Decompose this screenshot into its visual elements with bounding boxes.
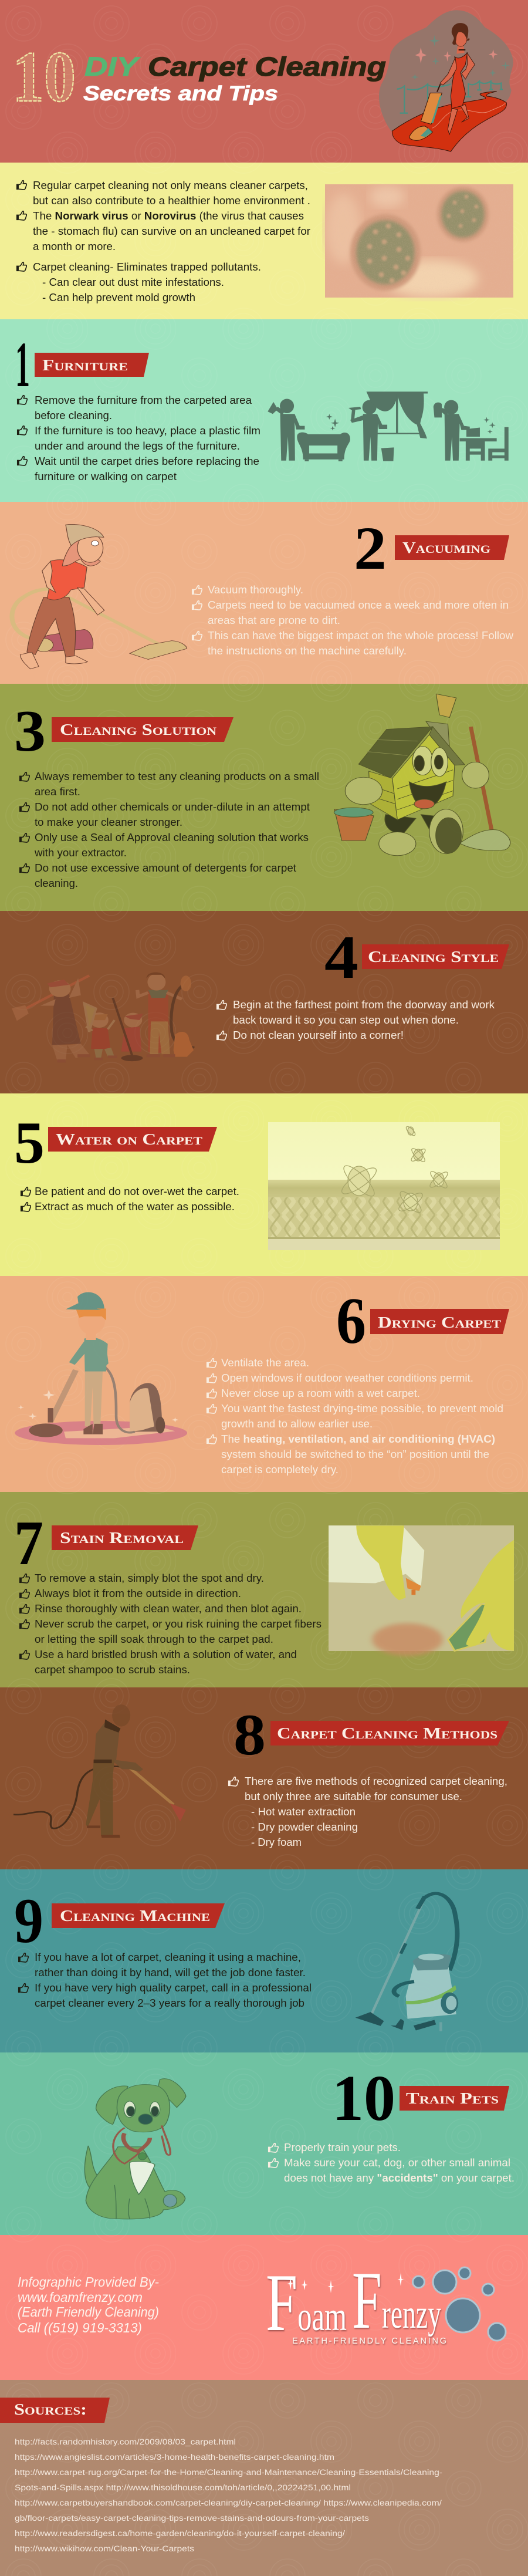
heading banner: train pets [400,2086,509,2111]
bullet: accidents: does not have any "accidents" on your carpet. [284,2172,515,2184]
bullet: accidents: Make sure your cat, dog, or other small animal [284,2157,510,2169]
panel: 8 carpet cleaning methods [13,1702,509,1848]
bullet: HVAC: carpet is completely dry. [221,1464,339,1476]
illustration: woman vacuuming [12,524,187,669]
heading banner: cleaning solution [52,717,233,742]
heading banner: cleaning style [362,944,509,969]
bullet: corner: Do not clean yourself into a corner! [233,1029,404,1041]
bullet: rinse: Rinse thoroughly with clean water, and then blot again. [35,1603,302,1615]
heading banner: carpet cleaning methods: Carpet Cleaning Methods [277,1724,497,1742]
source links: gb/floor-carpets/easy-carpet-cleaning-tips-remove-stains-and-odours-from-your-carpets [15,2514,369,2523]
bullet: seal of approval [19,832,309,859]
bullet: HVAC: The heating, ventilation, and air conditioning (HVAC) [221,1433,495,1445]
numeral 2: 2 [354,515,387,582]
bullet: biggest impact [192,630,514,657]
panel: 6 drying carpet [15,1285,509,1476]
logo: Foam Frenzy [266,2255,506,2348]
bullet: once a week: Carpets need to be vacuumed once a week and more often in [208,599,509,611]
bullet: wait until dry: Wait until the carpet dries before replacing the [35,455,259,467]
illustration: man with carpet cleaner [15,1292,187,1445]
illustration: cleaners silhouettes [268,391,509,461]
bullet: pollutants [16,261,261,303]
bullet: never scrub: Never scrub the carpet, or you risk ruining the carpet fibers [35,1618,321,1630]
bullet: test products: Always remember to test any cleaning products on a small [35,771,319,782]
bullet: brush [19,1649,297,1676]
bullet: machine [18,1952,306,1979]
heading banner: drying carpet: Drying Carpet [378,1314,501,1331]
numeral 3: 3 [14,698,46,764]
source links: http://www.carpetbuyershandbook.com/carpet-cleaning/diy-carpet-cleaning/ https://www.cleanipedia.com/ [15,2499,442,2507]
source links: http://www.wikihow.com/Clean-Your-Carpets [15,2544,194,2553]
bullet: machine: If you have a lot of carpet, cleaning it using a machine, [35,1952,301,1963]
bullet: farthest point [216,999,495,1026]
bullet: do not add chemicals [19,801,310,828]
bullet: plastic film: under and around the legs of the furniture. [35,440,240,452]
bullet: five methods: - Hot water extraction [251,1806,356,1818]
bullet: do not add chemicals: to make your cleaner stronger. [35,816,182,828]
numeral 5: 5 [14,1110,45,1176]
heading banner: water on carpet: Water on Carpet [56,1130,202,1148]
bullet: pollutants: - Can clear out dust mite infestations. [42,276,224,288]
source links: http://www.carpet-rug.org/Carpet-for-the-Home/Cleaning-and-Maintenance/Cleaning-Essentials/Cleaning- [15,2468,442,2477]
heading banner: furniture [35,353,149,377]
panel: 10 train pets [84,2062,515,2219]
numeral 8: 8 [233,1702,266,1767]
panel: header [12,10,513,151]
heading banner: carpet cleaning methods [270,1721,509,1746]
numeral 6: 6 [336,1285,366,1358]
heading banner: furniture: Furniture [42,356,128,374]
source links [15,2437,442,2553]
bullet: direction: Always blot it from the outside in direction. [35,1588,241,1599]
panel: 7 stain removal [14,1508,514,1676]
bullet: five methods: There are five methods of recognized carpet cleaning, [245,1775,507,1787]
photo: carpet fibres with particles [268,1122,500,1250]
photo: virus micrograph [325,184,513,298]
title: DIY Carpet Cleaning: DIY [84,52,141,82]
bullet: professional: If you have very high quality carpet, call in a professional [35,1982,312,1994]
source links: http://facts.randomhistory.com/2009/08/03_carpet.html [15,2437,236,2446]
numeral 7: 7 [14,1508,43,1578]
numeral 10: 10 [332,2062,395,2135]
bullet: norovirus: The Norwark virus or Norovirus (the virus that causes [33,210,304,222]
bullet: professional: carpet cleaner every 2–3 years for a really thorough job [35,1997,304,2009]
illustration: puppy with leash [84,2079,186,2219]
photo: stain cleaning with gloves [329,1525,514,1656]
bullet: fastest drying: growth and to allow earlier use. [221,1418,373,1430]
bullet: extract water: Extract as much of the water as possible. [35,1201,235,1213]
bullet: test products [19,771,319,798]
bullet: be patient: Be patient and do not over-wet the carpet. [35,1186,239,1197]
bullet: HVAC: system should be switched to the “on” position until the [221,1449,489,1460]
source links: Spots-and-Spills.aspx http://www.thisoldhouse.com/toh/article/0,,20224251,00.html [15,2483,351,2492]
bullet: pollutants: Carpet cleaning- Eliminates trapped pollutants. [33,261,261,273]
bullet: wait until dry [17,455,259,482]
heading banner: sources [0,2398,110,2423]
logo: Foam Frenzy: Foam [266,2257,347,2348]
panel: 4 cleaning style [12,923,509,1062]
logo: Foam Frenzy: EARTH-FRIENDLY CLEANING [292,2337,446,2346]
bullet: farthest point: Begin at the farthest point from the doorway and work [233,999,495,1011]
panel: 2 vacuuming [12,515,514,669]
bullet: fastest drying: You want the fastest drying-time possible, to prevent mold [221,1403,503,1414]
heading banner: sources: Sources: [14,2401,87,2418]
illustration: vacuum cleaner [356,1893,458,2031]
bullet: wait until dry: furniture or walking on carpet [35,471,177,482]
credit text: www.foamfrenzy.com [18,2290,143,2305]
panel: 5 water on carpet [14,1110,500,1250]
bullet: windows: Open windows if outdoor weather conditions permit. [221,1372,473,1384]
credit text: (Earth Friendly Cleaning) [18,2304,159,2320]
numeral 9: 9 [14,1885,43,1956]
bullet: once a week: areas that are prone to dirt. [208,615,340,626]
bullet: regular cleaning: but can also contribute to a healthier home environment . [33,195,310,207]
bullet: once a week [192,599,509,626]
heading banner: cleaning machine [52,1903,225,1928]
bullet: blot: To remove a stain, simply blot the spot and dry. [35,1572,264,1584]
bullet: regular cleaning [16,180,310,207]
bullet: pollutants: - Can help prevent mold growth [42,292,195,303]
bullet: ventilate: Ventilate the area. [221,1357,309,1369]
heading banner: train pets: Train Pets [406,2089,499,2107]
panel: introduction [16,180,513,303]
bullet: norovirus [16,210,310,252]
panel: sources [0,2398,442,2553]
bullet: biggest impact: the instructions on the machine carefully. [208,645,407,657]
bullet: five methods: but only three are suitable for consumer use. [245,1791,462,1802]
bullet: fastest drying [207,1403,503,1430]
illustration: house mascot [334,694,510,856]
credit text [18,2274,159,2335]
bullet: HVAC [207,1433,495,1476]
bullet: plastic film [17,425,260,452]
title: DIY Carpet Cleaning [84,52,386,82]
bullet: train your pets: Properly train your pets. [284,2142,401,2153]
bullet: excessive detergent [19,862,296,889]
bullet: never scrub: or letting the spill soak through to the carpet pad. [35,1633,273,1645]
bullet: never close up: Never close up a room with a wet carpet. [221,1387,420,1399]
heading banner: cleaning style: Cleaning Style [368,948,499,965]
bullet: five methods [228,1775,507,1848]
panel: 3 cleaning solution [14,694,510,889]
bullet: five methods: - Dry powder cleaning [251,1821,358,1833]
bullet: norovirus: a month or more. [33,241,116,252]
bullet: remove furniture: Remove the furniture from the carpeted area [35,394,252,406]
subtitle: Secrets and Tips [83,82,278,105]
illustration: man with wand [13,1704,186,1838]
panel: provider credit and logo [18,2255,506,2348]
heading banner: vacuuming [395,535,509,560]
bullet: norovirus: the - stomach flu) can survive on an uncleaned carpet for [33,225,310,237]
bullet: seal of approval: Only use a Seal of Approval cleaning solution that works [35,832,309,843]
heading banner: cleaning solution: Cleaning Solution [60,721,216,738]
credit text: Call ((519) 919-3313) [18,2320,142,2335]
bullet: test products: area first. [35,786,80,798]
credit text: Infographic Provided By- [18,2274,159,2290]
bullet: never scrub [19,1618,321,1645]
bullet: excessive detergent: Do not use excessive amount of detergents for carpet [35,862,296,874]
source links: http://www.readersdigest.ca/home-garden/cleaning/do-it-yourself-carpet-cleaning/ [15,2529,345,2538]
bullet: biggest impact: This can have the biggest impact on the whole process! Follow [208,630,514,642]
numeral 4: 4 [324,923,358,991]
bullet: plastic film: If the furniture is too heavy, place a plastic film [35,425,260,437]
illustration: woman vacuuming red carpet [379,10,513,151]
heading banner: water on carpet [48,1127,217,1152]
bullet: vacuum thoroughly: Vacuum thoroughly. [208,584,303,596]
bullet: professional [18,1982,312,2009]
heading banner: stain removal: Stain Removal [60,1529,184,1547]
heading banner: stain removal [52,1525,198,1550]
bullet: excessive detergent: cleaning. [35,877,78,889]
title numeral 10: 10 [12,36,76,117]
bullet: regular cleaning: Regular carpet cleaning not only means cleaner carpets, [33,180,308,191]
bullet: do not add chemicals: Do not add other chemicals or under-dilute in an attempt [35,801,310,813]
source links: https://www.angieslist.com/articles/3-home-health-benefits-carpet-cleaning.htm [15,2453,334,2462]
heading banner: vacuuming: Vacuuming [402,539,490,556]
bullet: remove furniture [17,394,252,421]
bullet: seal of approval: with your extractor. [34,847,127,859]
bullet: remove furniture: before cleaning. [35,410,112,421]
logo: Foam Frenzy: Frenzy [352,2255,441,2346]
title: DIY Carpet Cleaning: Carpet Cleaning [148,52,386,82]
bullet: machine: rather than doing it by hand, will get the job done faster. [35,1967,306,1979]
panel: 1 furniture: 1 [15,329,30,400]
illustration: family cleaning [12,973,194,1062]
bullet: brush: Use a hard bristled brush with a solution of water, and [35,1649,297,1660]
panel: 9 cleaning machine [14,1885,458,2031]
heading banner: drying carpet [370,1309,509,1334]
bullet: five methods: - Dry foam [251,1836,302,1848]
panel: 1 furniture [15,329,509,482]
bullet: farthest point: back toward it so you can step out when done. [233,1014,459,1026]
heading banner: cleaning machine: Cleaning Machine [60,1907,210,1925]
bullet: accidents [268,2157,515,2184]
bullet: brush: carpet shampoo to scrub stains. [35,1664,190,1676]
